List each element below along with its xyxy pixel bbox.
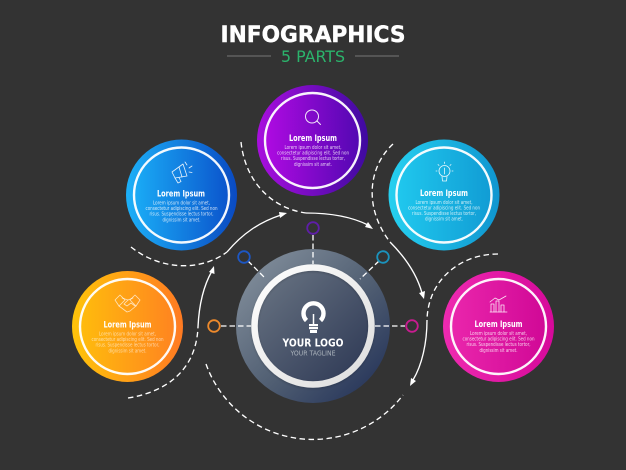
heading: Lorem Ipsum [420,189,468,199]
body text: risus. Suspendisse lectus tortor, [96,343,160,349]
pin: blue [238,251,266,279]
icon: magnifier [306,110,320,124]
body text: dignissim sit amet. [425,217,463,223]
panel: purple circle [257,85,368,196]
panel: cyan circle [388,140,500,250]
body text: Lorem ipsum dolor sit amet, [470,331,527,337]
body text: dignissim sit amet. [108,348,147,354]
body text: risus. Suspendisse lectus tortor, [150,212,214,218]
connector: large dashed arc under centre [206,364,403,439]
body text: Lorem ipsum dolor sit amet, [153,200,210,206]
icon: logo light bulb [304,303,324,333]
connector arrow: orange to blue [128,266,214,398]
icon: idea bulb [436,162,453,181]
heading: Lorem Ipsum [157,190,205,200]
icon: bar chart [490,296,507,312]
body text [462,331,534,354]
pin: pink [375,320,418,332]
body text: consectetur adipiscing elit. Sed non [277,151,349,157]
logo text: YOUR LOGO [282,338,344,350]
heading: Lorem Ipsum [289,134,337,144]
body text [277,145,349,168]
body text: dignissim sit amet. [480,348,518,354]
body text: consectetur adipiscing elit. Sed non [92,337,164,343]
body text: risus. Suspendisse lectus tortor, [466,342,531,348]
icon: handshake [115,295,140,312]
heading: Lorem Ipsum [474,320,523,330]
body text [146,200,218,223]
connector arrow: pink to bottom arc [410,254,498,386]
pin: cyan [360,251,389,279]
body text: consectetur adipiscing elit. Sed non [462,337,534,343]
panel: orange circle [72,271,183,382]
icon: megaphone [172,162,192,183]
body text: Lorem ipsum dolor sit amet, [99,332,156,338]
body text: dignissim sit amet. [294,162,332,168]
connector arrow: purple to cyan [241,142,373,229]
body text: consectetur adipiscing elit. Sed non [146,206,218,212]
panel: centre logo circle [236,249,390,403]
body text: dignissim sit amet. [162,217,201,223]
body text [92,332,164,354]
panel: blue circle [126,140,237,250]
connector arrow: cyan to pink [372,144,425,299]
body text: Lorem ipsum dolor sit amet, [416,200,473,206]
subtitle: 5 parts: 5 PARTS [281,47,345,66]
tagline: YOUR TAGLINE [290,350,336,358]
body text: risus. Suspendisse lectus tortor, [412,211,476,217]
title: INFOGRAPHICS [220,22,406,48]
heading: Lorem Ipsum [104,320,152,330]
body text [408,200,480,223]
pin: purple [307,222,319,264]
connector arrow: blue to purple [131,212,287,266]
body text: consectetur adipiscing elit. Sed non [408,205,480,211]
body text: Lorem ipsum dolor sit amet, [284,145,342,151]
panel: pink circle [443,271,554,382]
pin: orange [208,320,251,332]
body text: risus. Suspendisse lectus tortor, [281,156,345,162]
